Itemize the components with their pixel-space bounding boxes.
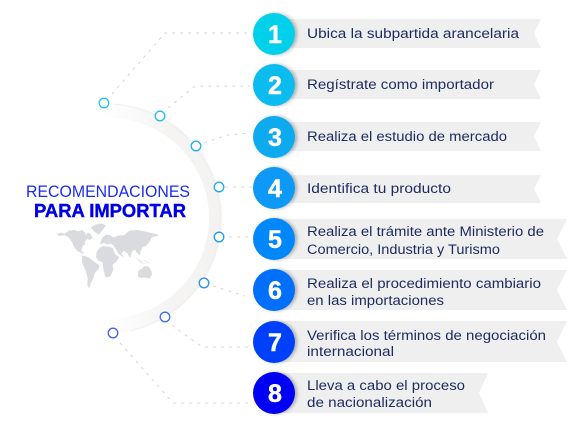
title: PARA IMPORTAR [34,201,186,221]
badge 4 [253,167,295,209]
step 6 [253,269,567,311]
ribbon 8 [274,373,488,413]
ribbon 7 [274,321,567,362]
title: RECOMENDACIONES [26,183,190,201]
title [26,183,190,221]
badge 1 [253,13,295,55]
badge 3: 3 [268,124,282,152]
step 7 [253,321,567,363]
badge 2: 2 [268,72,282,100]
step 4 [253,167,541,209]
text 6 line 2: en las importaciones [307,293,444,308]
step 3 [253,116,541,158]
badge 6 [253,269,295,311]
badge 8 [253,372,295,414]
text 7: Verifica los términos de negociación [307,328,546,343]
ribbon 2 [274,70,541,99]
ribbon 3 [274,122,541,151]
ribbon 4 [274,175,541,203]
text 3: Realiza el estudio de mercado [307,129,507,144]
badge 4: 4 [268,175,282,203]
badge 5: 5 [268,226,282,254]
text 6: Realiza el procedimiento cambiario [307,276,541,291]
text 8: Lleva a cabo el proceso [307,378,465,393]
connector nodes [99,98,224,338]
text 2: Regístrate como importador [307,77,495,92]
connector lines [112,33,252,403]
step 8 [253,372,488,414]
badge 3 [253,116,295,158]
step 2 [253,64,541,106]
step 5 [253,218,567,260]
text 5 line 2: Comercio, Industria y Turismo [307,242,500,257]
badge 6: 6 [268,277,282,305]
badge 8: 8 [268,380,282,408]
step 1 [253,13,541,55]
decorative ring [0,103,222,333]
badge 5 [253,218,295,260]
text 7 line 2: internacional [307,344,394,359]
icon: world map [57,223,159,289]
badge 1: 1 [268,21,282,49]
badge 2 [253,64,295,106]
ribbon 6 [274,270,567,310]
badge 7 [253,321,295,363]
text 1: Ubica la subpartida arancelaria [307,26,520,41]
badge 7: 7 [268,329,282,357]
ribbon 1 [274,19,541,48]
text 5: Realiza el trámite ante Ministerio de [307,224,544,239]
ribbon 5 [274,219,567,259]
text 8 line 2: de nacionalización [307,395,432,410]
text 4: Identifica tu producto [307,181,451,196]
